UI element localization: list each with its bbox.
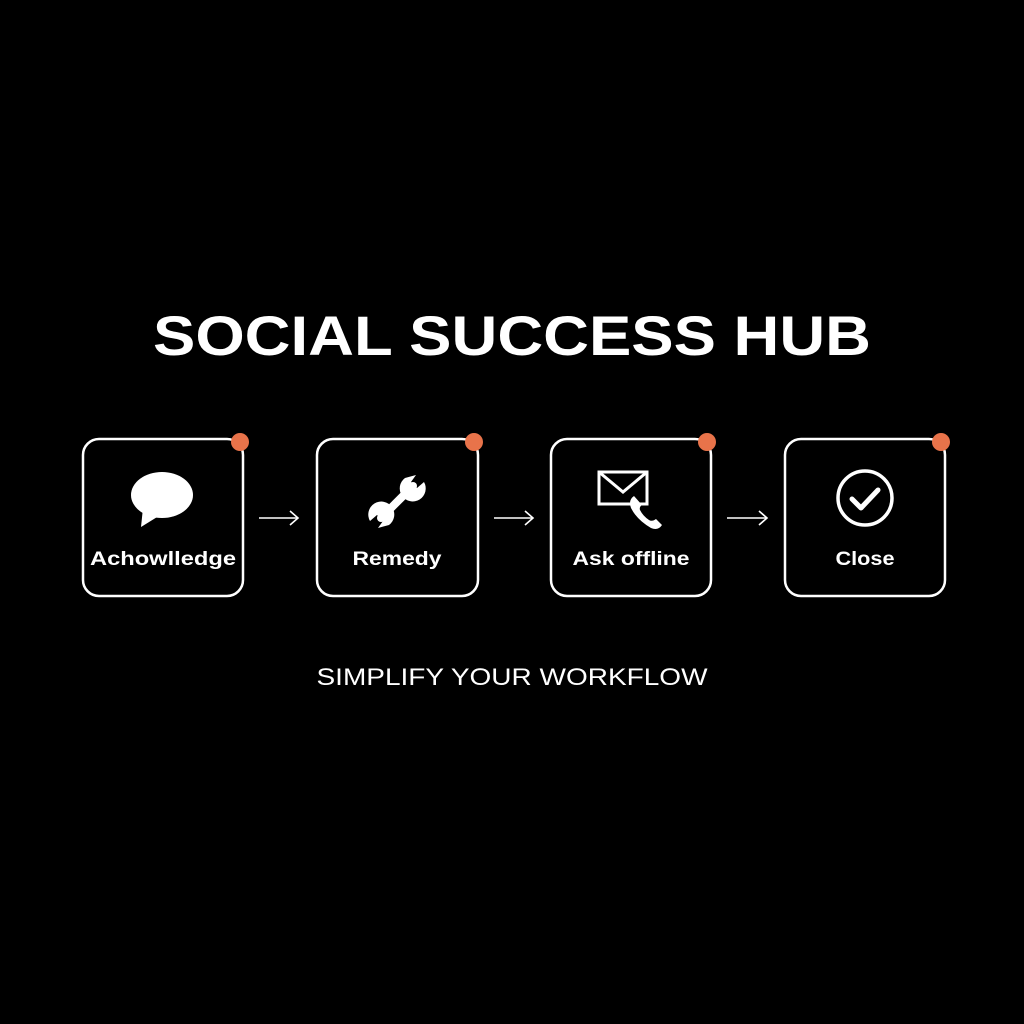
title: SOCIAL SUCCESS HUB [153, 304, 871, 367]
arrow 1 [259, 511, 298, 525]
step 4: Close: Close [836, 549, 894, 570]
icon: check circle [838, 471, 892, 525]
step 2: Remedy: Remedy [352, 549, 442, 570]
arrow 2 [494, 511, 533, 525]
step 3: Ask offline: Ask offline [572, 549, 690, 570]
step 3: Ask offline [551, 433, 716, 596]
step 4: Close [785, 433, 950, 596]
arrow 3 [727, 511, 767, 525]
step 1: Achowlledge: Achowlledge [90, 549, 236, 570]
icon: speech bubble [131, 472, 193, 527]
step 2: Remedy [317, 433, 483, 596]
icon: envelope and phone [599, 472, 662, 529]
subtitle: SIMPLIFY YOUR WORKFLOW [316, 664, 708, 691]
step 1: Achowlledge [83, 433, 249, 596]
icon: wrench [368, 475, 426, 528]
